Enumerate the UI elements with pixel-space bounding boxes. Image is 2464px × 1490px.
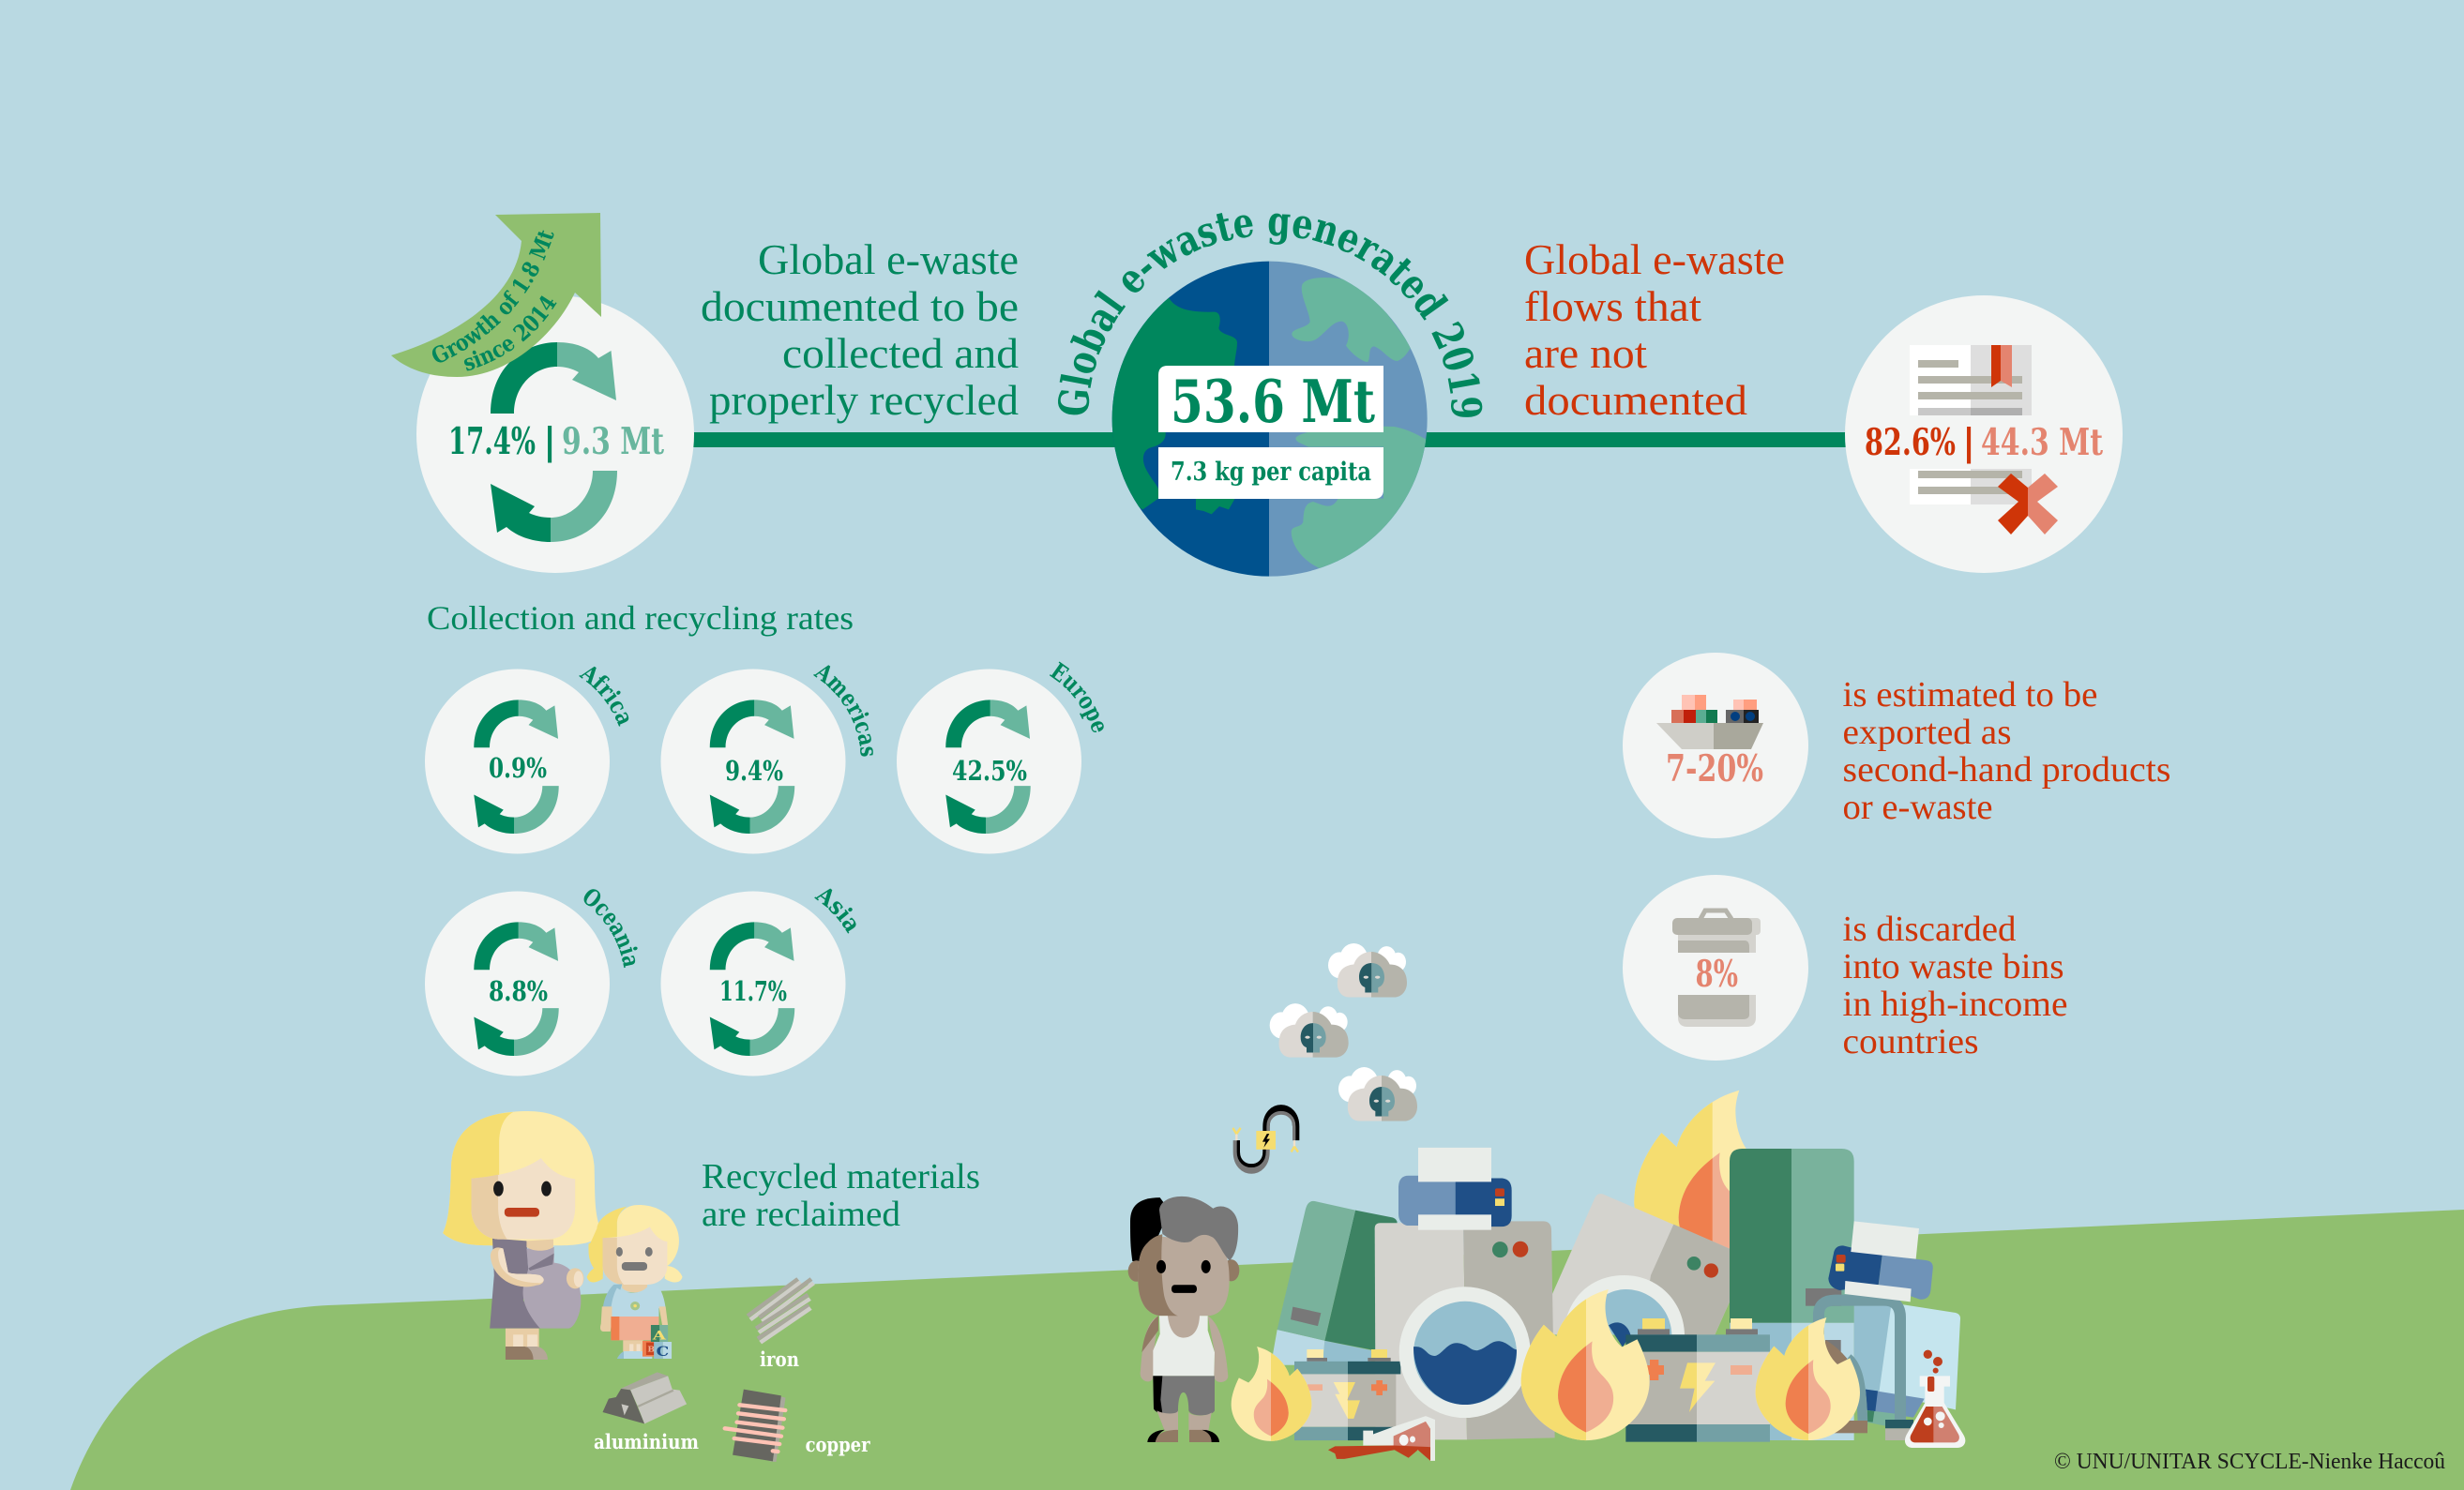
label: copper: copper	[806, 1433, 870, 1456]
panel: Europe	[897, 662, 1104, 853]
illustration: mother	[443, 1111, 603, 1360]
illustration: tall fridge	[1730, 1149, 1854, 1440]
stat: exported: 7-20%	[1666, 747, 1763, 790]
panel: Asia: 11.7%	[719, 975, 787, 1007]
panel: Americas: 9.4%	[725, 755, 783, 787]
panel: Africa: 0.9%	[489, 752, 547, 784]
text: recycled materials: are reclaimed	[702, 1195, 900, 1234]
icon: copper coil	[725, 1390, 785, 1462]
icon: aluminium ingots	[602, 1372, 687, 1423]
text: undocumented flows	[1524, 235, 1785, 424]
panel: Asia: Asia	[814, 889, 856, 934]
panel: undocumented circle	[1845, 295, 2123, 573]
text: exported description: or e-waste	[1842, 788, 1992, 827]
stat: binned: 8%	[1696, 953, 1738, 996]
text: bin description: countries	[1842, 1022, 1979, 1061]
text: undocumented flows: flows that	[1524, 282, 1701, 330]
illustration: tablet, arch and tilted printer	[1806, 1221, 1960, 1440]
text: bin description: in high-income	[1842, 985, 2067, 1024]
panel: bin circle	[1623, 875, 1808, 1061]
panel: Europe: Europe	[1050, 662, 1104, 732]
label: aluminium: aluminium	[594, 1430, 699, 1453]
callout: per capita	[1158, 447, 1383, 499]
illustration: back flame	[1634, 1091, 1789, 1272]
stat: undocumented share: 82.6%	[1865, 421, 1956, 464]
text: documented collected and recycled: documented to be	[701, 282, 1019, 330]
illustration: child with blocks: A	[651, 1329, 666, 1344]
illustration: man	[1128, 1197, 1239, 1442]
panel: Americas	[660, 665, 873, 853]
text: undocumented flows: Global e-waste	[1524, 235, 1785, 283]
callout: total generated: 53.6 Mt	[1171, 367, 1375, 436]
panel: Africa	[425, 666, 628, 853]
icon: iron bars	[748, 1279, 813, 1343]
text: documented collected and recycled: properly recycled	[709, 376, 1019, 424]
text: undocumented flows: documented	[1524, 376, 1747, 424]
text: bin description	[1842, 910, 2067, 1061]
illustration: tilted green appliance	[1271, 1201, 1398, 1365]
illustration: left battery	[1294, 1349, 1400, 1440]
text: documented collected and recycled	[701, 235, 1019, 424]
heading: collection rates: Collection and recycling rates	[427, 599, 854, 637]
illustration: tilted washing machine	[1552, 1194, 1730, 1347]
illustration: fallen flask with spill	[1328, 1416, 1435, 1461]
text: recycled materials: Recycled materials	[702, 1157, 980, 1197]
arrow: growth banner: since 2014	[463, 295, 557, 371]
illustration: front washing machine body	[1375, 1221, 1555, 1439]
illustration: left flame	[1232, 1347, 1311, 1441]
stat: undocumented share: |	[1962, 421, 1975, 464]
illustration: centre flame	[1521, 1289, 1650, 1440]
text: exported description	[1842, 675, 2170, 827]
panel: documented recycled circle	[416, 295, 694, 573]
text: exported description: exported as	[1842, 713, 2011, 752]
arrow: growth banner	[391, 213, 601, 377]
panel: Oceania	[425, 889, 638, 1076]
stat: recycled share: |	[543, 420, 556, 463]
stat: recycled share: 9.3 Mt	[562, 420, 664, 463]
illustration: child with blocks	[587, 1205, 682, 1360]
stat: recycled share: 17.4%	[448, 420, 536, 463]
illustration: right battery	[1625, 1318, 1770, 1442]
panel: Asia	[660, 889, 856, 1076]
connector bar	[689, 432, 1852, 447]
callout: per capita: 7.3 kg per capita	[1171, 458, 1371, 487]
label: iron: iron	[760, 1347, 799, 1371]
illustration: child with blocks: B	[647, 1346, 656, 1355]
arrow: growth banner: Growth of 1.8 Mt	[431, 231, 553, 362]
icon: document with bookmark	[1910, 345, 2032, 415]
text: exported description: second-hand products	[1842, 750, 2170, 790]
green hill ground	[70, 1210, 2464, 1490]
text: documented collected and recycled: collected and	[782, 329, 1019, 377]
callout: total generated	[1158, 366, 1383, 499]
illustration: upright flask	[1905, 1350, 1965, 1448]
icon: cargo ship	[1656, 695, 1763, 749]
icon: recycling arrows	[491, 342, 617, 542]
curved title: Global e-waste generated 2019	[1058, 213, 1482, 417]
globe	[1112, 261, 1428, 577]
illustration: right flame	[1756, 1317, 1860, 1440]
text: recycled materials	[702, 1157, 980, 1234]
text: undocumented flows: are not	[1524, 329, 1647, 377]
illustration: front washing machine door	[1399, 1287, 1531, 1418]
panel: Europe: 42.5%	[952, 755, 1027, 787]
text: documented collected and recycled: Global e-waste	[758, 235, 1019, 283]
panel: Oceania: 8.8%	[489, 975, 548, 1007]
icon: toxic clouds	[1270, 943, 1417, 1121]
illustration: printer on washing machine	[1398, 1148, 1512, 1230]
panel: Oceania: Oceania	[583, 889, 638, 968]
icon: cable	[1232, 1108, 1298, 1169]
text: bin description: into waste bins	[1842, 947, 2063, 986]
credit: © UNU/UNITAR SCYCLE-Nienke Haccoû	[2054, 1450, 2445, 1474]
panel: Africa: Africa	[579, 666, 628, 727]
panel: exported circle	[1623, 653, 1808, 838]
stat: undocumented share: 44.3 Mt	[1981, 421, 2103, 464]
illustration: child with blocks: C	[657, 1344, 669, 1360]
icon: waste bin	[1672, 911, 1761, 1027]
text: exported description: is estimated to be	[1842, 675, 2097, 715]
panel: Americas: Americas	[813, 665, 873, 757]
text: bin description: is discarded	[1842, 910, 2017, 949]
icon: crossed document	[1910, 469, 2058, 534]
